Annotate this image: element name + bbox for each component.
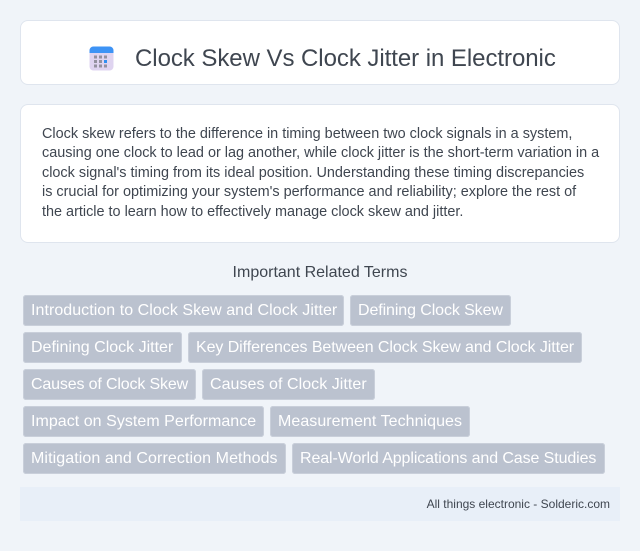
summary text: is crucial for optimizing your system's performance and reliability; explore the rest of <box>42 184 576 200</box>
tag: Defining Clock Jitter <box>31 339 173 356</box>
icon: calendar <box>90 46 114 70</box>
footer text: All things electronic - Solderic.com <box>427 497 610 511</box>
tag: Introduction to Clock Skew and Clock Jitter <box>31 302 337 319</box>
tag: Mitigation and Correction Methods <box>31 450 278 467</box>
heading: related terms: Important Related Terms <box>233 264 407 281</box>
tag <box>23 295 344 326</box>
summary panel <box>20 104 620 243</box>
tag <box>188 332 582 363</box>
tag: Causes of Clock Skew <box>31 376 188 393</box>
tag: Real-World Applications and Case Studies <box>300 450 596 467</box>
tag <box>23 332 182 363</box>
summary text <box>42 126 600 220</box>
tag <box>23 406 264 437</box>
tag <box>23 369 196 400</box>
tag: Defining Clock Skew <box>358 302 503 319</box>
tag: Causes of Clock Jitter <box>210 376 367 393</box>
tag <box>270 406 470 437</box>
tag <box>292 443 605 474</box>
header card <box>20 20 620 85</box>
summary text: Clock skew refers to the difference in timing between two clock signals in a system, <box>42 126 572 142</box>
title: Clock Skew Vs Clock Jitter in Electronic <box>135 45 556 72</box>
summary text: the article to learn how to effectively manage clock skew and jitter. <box>42 204 463 220</box>
related terms tags <box>23 295 605 474</box>
summary text: clock signal's timing from its ideal position. Understanding these timing discrepancies <box>42 165 584 181</box>
summary text: causing one clock to lead or lag another, while clock jitter is the short-term variation in a <box>42 145 599 161</box>
tag <box>350 295 511 326</box>
tag: Key Differences Between Clock Skew and Clock Jitter <box>196 339 574 356</box>
tag <box>23 443 286 474</box>
tag <box>202 369 375 400</box>
tag: Measurement Techniques <box>278 413 462 430</box>
footer <box>20 487 620 521</box>
tag: Impact on System Performance <box>31 413 256 430</box>
